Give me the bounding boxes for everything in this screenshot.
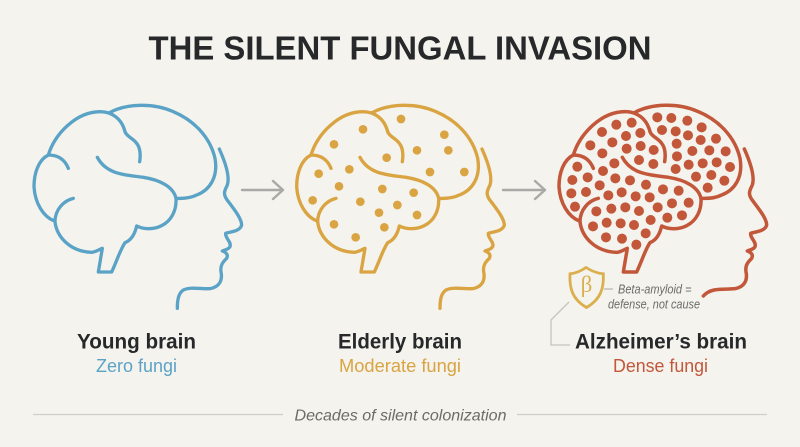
label: elderly brain: Moderate fungi <box>339 356 461 376</box>
moderate fungi dots <box>308 115 469 242</box>
timeline footer: Decades of silent colonization <box>294 408 507 424</box>
label: alzheimer's brain: Alzheimer’s brain <box>575 330 747 354</box>
label: young brain <box>77 330 196 376</box>
leader line: shield to label <box>551 302 570 345</box>
arrow: elderly to alzheimer's <box>503 181 545 199</box>
callout: beta-amyloid text: defense, not cause <box>608 298 700 312</box>
icon: young brain head <box>34 105 242 308</box>
label: young brain: Zero fungi <box>96 356 177 376</box>
label: elderly brain <box>338 330 462 376</box>
dense fungi dots <box>566 112 735 250</box>
title: THE SILENT FUNGAL INVASION <box>148 30 652 68</box>
icon: beta shield: β <box>581 272 592 297</box>
icon: elderly brain head <box>297 105 504 308</box>
callout connector: shield to text <box>604 288 613 290</box>
icon: alzheimer's brain head <box>559 105 767 296</box>
label: elderly brain: Elderly brain <box>338 330 462 354</box>
callout: beta-amyloid text <box>608 282 700 312</box>
callout: beta-amyloid text: Beta-amyloid = <box>618 282 692 296</box>
arrow: young to elderly <box>242 181 283 199</box>
icon: beta shield <box>570 268 603 308</box>
label: alzheimer's brain: Dense fungi <box>613 356 708 376</box>
label: young brain: Young brain <box>77 330 196 354</box>
label: alzheimer's brain <box>575 330 747 376</box>
